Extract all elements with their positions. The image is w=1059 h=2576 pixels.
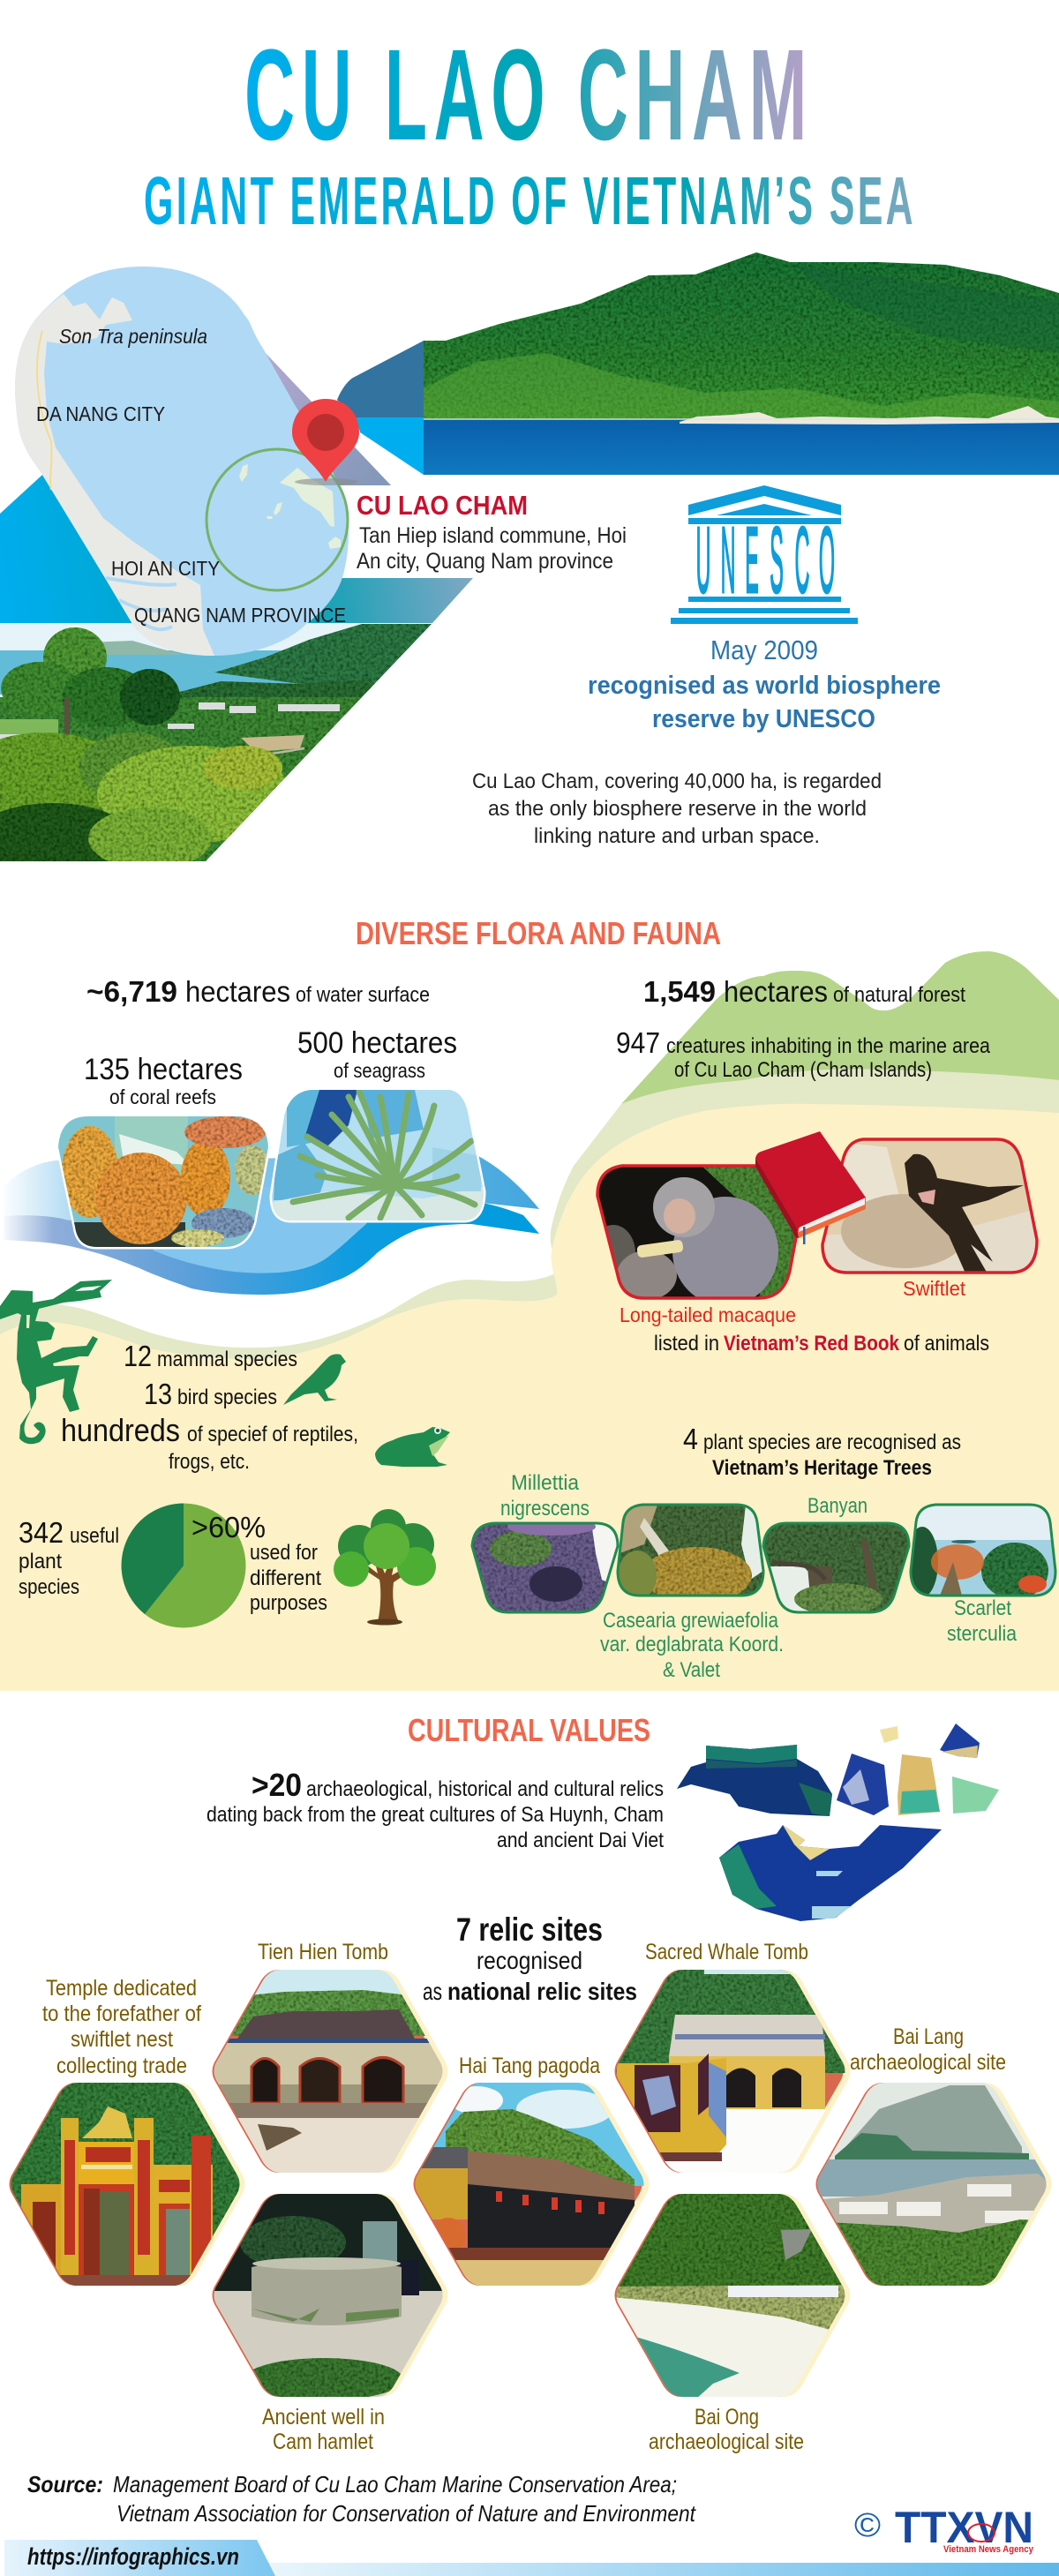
text: relics [207, 1767, 664, 1852]
hexagon photo: Sacred Whale tomb [612, 1967, 851, 2175]
label: Bai Ong: archaeological site [649, 2430, 804, 2454]
text: description: as the only biosphere reserve in the world [488, 797, 867, 821]
hexagon photo: temple gate [6, 2080, 245, 2288]
stat: mammal species: 12 [124, 1340, 152, 1372]
stat: natural forest [643, 975, 965, 1008]
text: Vietnam's Red Book [654, 1332, 989, 1356]
caption: Scarlet sterculia: sterculia [947, 1622, 1018, 1646]
stat: useful plant species: 342 [19, 1516, 64, 1549]
stat: mammal species [124, 1340, 297, 1372]
text: UNESCO recognition: recognised as world biosphere [588, 672, 941, 700]
tree [1, 627, 180, 727]
stat: useful plant species: species [19, 1575, 79, 1599]
icon: UNESCO logo: UNESCO [696, 509, 835, 612]
stat: bird species: bird species [177, 1386, 277, 1409]
hexagon photo: ancient well [209, 2191, 448, 2400]
text: relics: archaeological, historical and cultural relics [306, 1777, 664, 1801]
mainland coastline [15, 294, 214, 656]
icon: location pin [292, 399, 359, 485]
label: Tien Hien Tomb: Tien Hien Tomb [258, 1940, 388, 1964]
stat: water surface: hectares [185, 975, 290, 1008]
label: Sacred Whale Tomb: Sacred Whale Tomb [645, 1940, 808, 1964]
back wave [4, 1156, 539, 1222]
text: heritage trees: Vietnam’s Heritage Trees [712, 1456, 932, 1480]
icon: UNESCO logo [671, 485, 858, 624]
stat: reptiles and frogs: frogs, etc. [169, 1450, 250, 1474]
stat: useful plant species: useful [70, 1524, 119, 1548]
text: used for different purposes: >60% [192, 1511, 266, 1543]
photo: Banyan [759, 1518, 913, 1615]
stat: seagrass [297, 1026, 457, 1082]
label: Temple dedicated: swiftlet nest [71, 2027, 173, 2052]
panel: flora and fauna background [0, 951, 1059, 1691]
caption: Casearia grewiaefolia [600, 1609, 784, 1682]
text: 7 relic sites: as [423, 1978, 442, 2005]
stat: water surface: ~6,719 [86, 975, 177, 1008]
panel: water illustration [4, 1156, 539, 1295]
caption: Millettia nigrescens: nigrescens [500, 1497, 590, 1521]
cyan connector [356, 417, 424, 475]
label: Hoi An City: HOI AN CITY [111, 557, 220, 580]
text: description: Cu Lao Cham, covering 40,000 ha, is regarded [472, 770, 882, 793]
text: Vietnam's Red Book: of animals [904, 1332, 989, 1356]
logo: TTXVN: TTXVN [895, 2503, 1033, 2552]
text: Vietnam's Red Book: Vietnam’s Red Book [724, 1332, 900, 1356]
teal band behind map [0, 475, 473, 623]
text: UNESCO recognition: reserve by UNESCO [652, 705, 875, 733]
label: Temple dedicated: Temple dedicated [46, 1976, 197, 2001]
map roads and rivers [37, 331, 51, 490]
caption: macaque: Long-tailed macaque [620, 1303, 796, 1326]
text: 7 relic sites: recognised [477, 1947, 582, 1974]
label: Bai Lang [850, 2024, 1006, 2075]
label: Temple dedicated [42, 1976, 201, 2078]
label: Bai Ong [649, 2405, 804, 2454]
photo: Casearia [616, 1504, 764, 1597]
stat: natural forest: hectares [724, 975, 828, 1008]
stat: marine creatures [616, 1026, 991, 1082]
stat: coral reefs: 135 hectares [84, 1053, 243, 1086]
callout: Cu Lao Cham location [357, 490, 627, 574]
caption: Scarlet sterculia: Scarlet [954, 1596, 1011, 1620]
pale green band [0, 1069, 1059, 1377]
caption: Millettia nigrescens: Millettia [511, 1471, 580, 1495]
caption: Casearia grewiaefolia: var. deglabrata Koord. [600, 1633, 784, 1656]
stat: coral reefs: of coral reefs [109, 1085, 216, 1108]
text: description: linking nature and urban space. [534, 824, 820, 848]
stat: water surface [86, 975, 430, 1008]
stat: marine creatures: 947 [616, 1026, 660, 1059]
label: Da Nang City: DA NANG CITY [36, 402, 165, 425]
caption: Banyan: Banyan [807, 1494, 867, 1518]
stat: mammal species: mammal species [157, 1348, 297, 1371]
label: Son Tra peninsula: Son Tra peninsula [59, 325, 207, 348]
text: 7 relic sites: 7 relic sites [456, 1911, 603, 1948]
label: Bai Ong: Bai Ong [695, 2405, 759, 2430]
logo: TTXVN: © [854, 2507, 881, 2544]
photo: island mountain and sea [424, 247, 1059, 475]
text: heritage trees: 4 [683, 1423, 698, 1455]
stat: seagrass: 500 hectares [297, 1026, 457, 1060]
dark blue connector [337, 341, 424, 417]
text: used for different purposes: used for [250, 1541, 318, 1565]
stat: coral reefs [84, 1053, 243, 1108]
stat: natural forest: of natural forest [833, 983, 965, 1007]
text: UNESCO recognition: May 2009 [710, 635, 818, 665]
heading: diverse flora and fauna: DIVERSE FLORA AND FAUNA [356, 915, 721, 951]
text: used for different purposes: different [250, 1566, 321, 1590]
stat: bird species: 13 [144, 1378, 172, 1410]
text: relics: dating back from the great cultures of Sa Huynh, Cham [207, 1803, 664, 1827]
stat: useful plant species [19, 1516, 119, 1599]
label: Ancient well: Cam hamlet [273, 2430, 373, 2454]
text: Vietnam's Red Book: listed in [654, 1332, 719, 1356]
caption: Millettia nigrescens [500, 1471, 590, 1521]
light wave highlight [150, 1187, 379, 1273]
text: source [27, 2471, 697, 2527]
label: Ancient well [262, 2405, 385, 2454]
stat: reptiles and frogs: of specief of reptiles, [187, 1423, 358, 1446]
photo: seagrass [265, 1085, 490, 1227]
photo: long-tailed macaque [596, 1164, 800, 1300]
icon: frog [375, 1427, 450, 1467]
Cham island [239, 464, 341, 549]
text: source: Vietnam Association for Conservation of Nature and Environment [116, 2500, 697, 2527]
photo: Millettia [468, 1518, 622, 1615]
purple connector wedge [263, 350, 391, 485]
cream ground [0, 1104, 1059, 1691]
label: Hai Tang pagoda: Hai Tang pagoda [459, 2054, 600, 2078]
label: Temple dedicated: collecting trade [56, 2054, 187, 2078]
green hills [621, 951, 1059, 1104]
panel: location map and photos [0, 247, 1059, 874]
icon: tree [334, 1509, 436, 1626]
text: heritage trees: plant species are recognised as [703, 1431, 961, 1454]
caption: Scarlet sterculia [947, 1596, 1018, 1646]
text: used for different purposes: purposes [250, 1591, 327, 1615]
caption: Casearia grewiaefolia: & Valet [663, 1658, 720, 1682]
footer strip [4, 2540, 1059, 2576]
caption: Casearia grewiaefolia: Casearia grewiaefolia [603, 1609, 779, 1633]
text: 7 relic sites: national relic sites [447, 1978, 637, 2005]
label: Ancient well: Ancient well in [262, 2405, 385, 2430]
callout: Cu Lao Cham location: Tan Hiep island commune, Hoi [359, 523, 627, 548]
hexagon photo: Bai Lang [813, 2080, 1052, 2288]
stat: bird species [144, 1378, 277, 1410]
callout: Cu Lao Cham location: CU LAO CHAM [357, 490, 528, 521]
circle highlighting islands [207, 449, 348, 590]
text: source: Source: [27, 2471, 103, 2497]
hexagon photo: Bai Ong [612, 2191, 851, 2400]
illustration: ceramic fragments [677, 1724, 999, 1921]
photo: coastal village viewed from hill [0, 623, 432, 874]
stat: marine creatures: creatures inhabiting in the marine area [666, 1034, 991, 1058]
text: used for different purposes [192, 1511, 327, 1615]
photo: Scarlet sterculia [906, 1500, 1059, 1599]
icon: monkey [0, 1280, 112, 1444]
label: Bai Lang: Bai Lang [893, 2024, 964, 2049]
text: description [472, 770, 882, 848]
stat: useful plant species: plant [19, 1550, 62, 1573]
stat: reptiles and frogs [61, 1412, 358, 1474]
text: relics: >20 [252, 1767, 302, 1803]
label: Temple dedicated: to the forefather of [42, 2001, 201, 2026]
foreground foliage [0, 732, 286, 861]
photo: swiftlet [821, 1137, 1040, 1275]
stat: seagrass: of seagrass [334, 1059, 425, 1082]
pie chart: over 60% used [122, 1504, 245, 1627]
text: 7 relic sites [423, 1911, 637, 2005]
icon: red book [755, 1131, 866, 1244]
stat: water surface: of water surface [296, 983, 430, 1007]
hexagon photo: Tien Hien tomb [209, 1967, 448, 2175]
icon: bird [283, 1354, 346, 1405]
caption: swiftlet: Swiftlet [903, 1277, 966, 1300]
website link: https://infographics.vn [27, 2543, 239, 2570]
text: relics: and ancient Dai Viet [497, 1829, 664, 1852]
callout: Cu Lao Cham location: An city, Quang Nam province [357, 549, 613, 574]
text: source: Management Board of Cu Lao Cham Marine Conservation Area; [113, 2471, 677, 2497]
heading: cultural values: CULTURAL VALUES [408, 1712, 650, 1748]
stat: natural forest: 1,549 [643, 975, 716, 1008]
stat: reptiles and frogs: hundreds [61, 1412, 180, 1448]
text: UNESCO recognition [588, 635, 941, 733]
text: heritage trees [683, 1423, 961, 1480]
stat: marine creatures: of Cu Lao Cham (Cham Islands) [674, 1058, 932, 1082]
map shape [15, 267, 349, 656]
label: Bai Lang: archaeological site [850, 2050, 1006, 2075]
hexagon photo: Hai Tang pagoda [410, 2080, 650, 2288]
logo: TTXVN: Vietnam News Agency [943, 2544, 1034, 2555]
main wave [4, 1191, 539, 1295]
photo: coral reef [53, 1112, 274, 1249]
label: Quang Nam Province: QUANG NAM PROVINCE [134, 604, 346, 627]
